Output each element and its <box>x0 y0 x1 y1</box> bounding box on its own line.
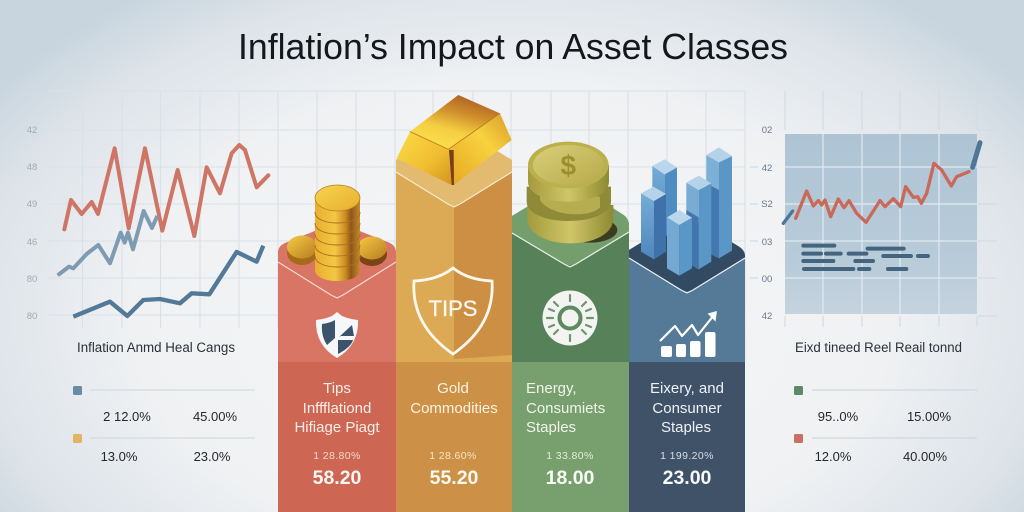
icon: TIPS shield <box>414 268 492 354</box>
green data card <box>512 362 629 512</box>
green data card: Staples <box>526 419 576 436</box>
red data card: Inffflationd <box>303 400 371 417</box>
icon: coin stack <box>287 185 387 281</box>
red data card <box>278 362 396 512</box>
right axis labels: 00 <box>762 274 772 285</box>
red trend line <box>796 163 969 222</box>
right axis labels: 42 <box>762 311 772 322</box>
green data card: Energy, <box>526 380 577 397</box>
dark blue line series <box>73 246 263 317</box>
left legend block <box>73 340 255 464</box>
right axis labels: 02 <box>762 125 772 136</box>
red data card: 58.20 <box>313 467 362 489</box>
right legend row 2: 12.0% <box>815 449 852 464</box>
gold column body <box>396 125 512 362</box>
blue data card: 1 199.20% <box>660 450 714 462</box>
right legend row 2: 40.00% <box>903 449 947 464</box>
blue data card <box>629 362 745 512</box>
green data card: 18.00 <box>546 467 595 489</box>
icon: olive coins <box>527 142 617 243</box>
dash legend marks <box>803 246 928 269</box>
right legend row 1 <box>794 386 977 424</box>
green data card: 1 33.80% <box>546 450 594 462</box>
left axis labels: 80 <box>27 274 37 285</box>
left axis labels: 46 <box>27 237 37 248</box>
panel: green column <box>512 142 629 512</box>
right axis labels: 42 <box>762 163 772 174</box>
left line chart <box>27 125 268 322</box>
icon: gold bar <box>397 95 512 185</box>
right axis labels: 03 <box>762 237 772 248</box>
left axis labels <box>27 125 37 322</box>
light blue line series <box>58 211 157 275</box>
right axis labels <box>761 125 773 322</box>
right legend row 2 <box>794 434 977 464</box>
red data card: Tips <box>323 380 351 397</box>
icon: sun badge <box>542 290 598 346</box>
right line chart <box>750 91 997 327</box>
icon: navy shield <box>316 312 358 358</box>
icon: 3d bars <box>641 147 732 276</box>
green data card: Consumiets <box>526 400 605 417</box>
panel: blue column <box>629 147 745 512</box>
blue data card: Staples <box>661 419 711 436</box>
red data card: 1 28.80% <box>313 450 361 462</box>
red line series <box>64 145 268 236</box>
left legend title: Inflation Anmd Heal Cangs <box>77 340 235 355</box>
red column body <box>278 222 396 362</box>
left axis labels: 80 <box>27 311 37 322</box>
green column body <box>512 181 629 362</box>
left legend row 1: 2 12.0% <box>103 409 151 424</box>
right legend row 1: 15.00% <box>907 409 951 424</box>
right legend title: Eixd tineed Reel Reail tonnd <box>795 340 962 355</box>
blue trend segments <box>783 143 980 223</box>
gold data card: 1 28.60% <box>429 450 477 462</box>
left legend row 1: 45.00% <box>193 409 237 424</box>
left legend row 2 <box>73 434 255 464</box>
left axis labels: 42 <box>27 125 37 136</box>
right axis labels: S2 <box>761 199 773 210</box>
gold data card: 55.20 <box>430 467 479 489</box>
gold data card: Gold <box>437 380 469 397</box>
gold data card: Commodities <box>410 400 498 417</box>
panel: red tips column <box>278 185 396 512</box>
left legend row 2: 13.0% <box>101 449 138 464</box>
left legend row 2: 23.0% <box>194 449 231 464</box>
left axis labels: 48 <box>27 162 37 173</box>
icon: olive coins: $ <box>561 150 577 181</box>
red data card: Hifiage Piagt <box>294 419 380 436</box>
left legend row 1 <box>73 386 255 424</box>
right legend block <box>794 340 977 464</box>
gold data card <box>396 362 512 512</box>
icon: growth chart <box>660 312 716 357</box>
panel: gold column <box>396 95 512 512</box>
blue data card: 23.00 <box>663 467 712 489</box>
blue data card: Eixery, and <box>650 380 724 397</box>
blue data card: Consumer <box>652 400 722 417</box>
blue column body <box>629 215 745 362</box>
icon: TIPS shield: TIPS <box>429 296 477 321</box>
right chart plot area <box>785 134 977 314</box>
left axis labels: 49 <box>27 199 37 210</box>
title: Inflation’s Impact on Asset Classes <box>238 26 788 67</box>
right legend row 1: 95..0% <box>818 409 859 424</box>
